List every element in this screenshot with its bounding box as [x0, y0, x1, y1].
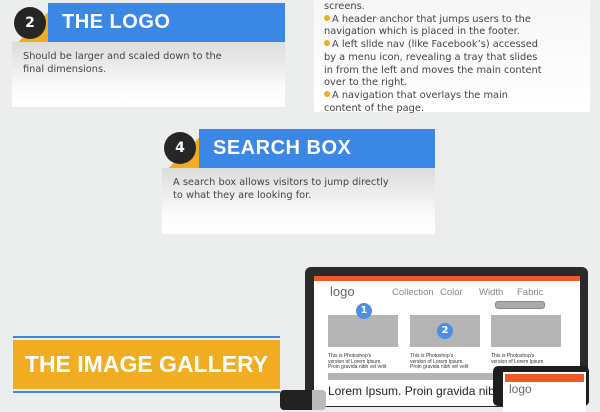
body text — [162, 168, 435, 234]
panel: navigation list: over to the right. — [324, 77, 407, 88]
laptop mockup: 1 — [361, 305, 367, 316]
panel: navigation list: A header anchor that jumps users to the — [332, 14, 531, 25]
laptop mockup: Collection — [392, 287, 434, 298]
panel: navigation list: A navigation that overlays the main — [332, 90, 508, 101]
banner: the image gallery: THE IMAGE GALLERY — [25, 351, 268, 377]
number badge 4 — [164, 132, 196, 164]
laptop mockup: version of Lorem Ipsum. — [410, 358, 464, 364]
yellow tab — [12, 3, 48, 42]
number badge 4: 4 — [175, 140, 185, 156]
laptop mockup: version of Lorem Ipsum. — [328, 358, 382, 364]
panel: navigation list: navigation which is placed in the footer. — [324, 26, 520, 37]
nav: logo — [330, 284, 355, 299]
panel: navigation list: content of the page. — [324, 103, 424, 114]
yellow tab — [162, 129, 199, 168]
laptop mockup: 2 — [442, 325, 448, 336]
body text: Should be larger and scaled down to the — [23, 51, 222, 62]
laptop mockup: This is Photoshop's — [410, 353, 453, 359]
panel: navigation list: in from the left and moves the main content — [324, 65, 542, 76]
number badge 2 — [14, 7, 46, 39]
number badge 2: 2 — [25, 15, 35, 31]
body text — [12, 42, 285, 107]
panel: navigation list: screens. — [324, 1, 365, 12]
laptop mockup: Fabric — [517, 287, 543, 298]
phone mockup — [280, 390, 326, 410]
body text: final dimensions. — [23, 64, 106, 75]
panel: the logo — [12, 3, 285, 107]
laptop mockup: This is Photoshop's — [328, 353, 371, 359]
laptop mockup: Color — [440, 287, 463, 298]
panel: navigation list: A left slide nav (like Facebook’s) accessed — [332, 39, 538, 50]
image boxes — [328, 315, 398, 347]
body text: to what they are looking for. — [173, 190, 311, 201]
panel: navigation list — [314, 0, 590, 112]
laptop mockup: version of Lorem Ipsum. — [491, 358, 545, 364]
tablet mockup — [493, 366, 589, 406]
header: the logo — [48, 3, 285, 42]
body text: A search box allows visitors to jump directly — [173, 177, 389, 188]
laptop mockup: Proin gravida nibh vel velit — [328, 364, 386, 370]
laptop mockup: This is Photoshop's — [491, 353, 534, 359]
panel: navigation list: by a menu icon, revealing a tray that slides — [324, 52, 537, 63]
header: search box: SEARCH BOX — [213, 137, 351, 159]
banner: the image gallery — [13, 336, 280, 393]
laptop mockup: Lorem Ipsum. Proin gravida nibh — [328, 384, 501, 398]
laptop mockup: Width — [479, 287, 503, 298]
header: search box — [199, 129, 435, 168]
tablet mockup: logo — [509, 382, 532, 396]
laptop mockup — [305, 267, 588, 407]
laptop mockup: Proin gravida nibh vel velit — [410, 364, 468, 370]
header: the logo: THE LOGO — [62, 11, 170, 33]
panel: search box — [162, 129, 435, 234]
